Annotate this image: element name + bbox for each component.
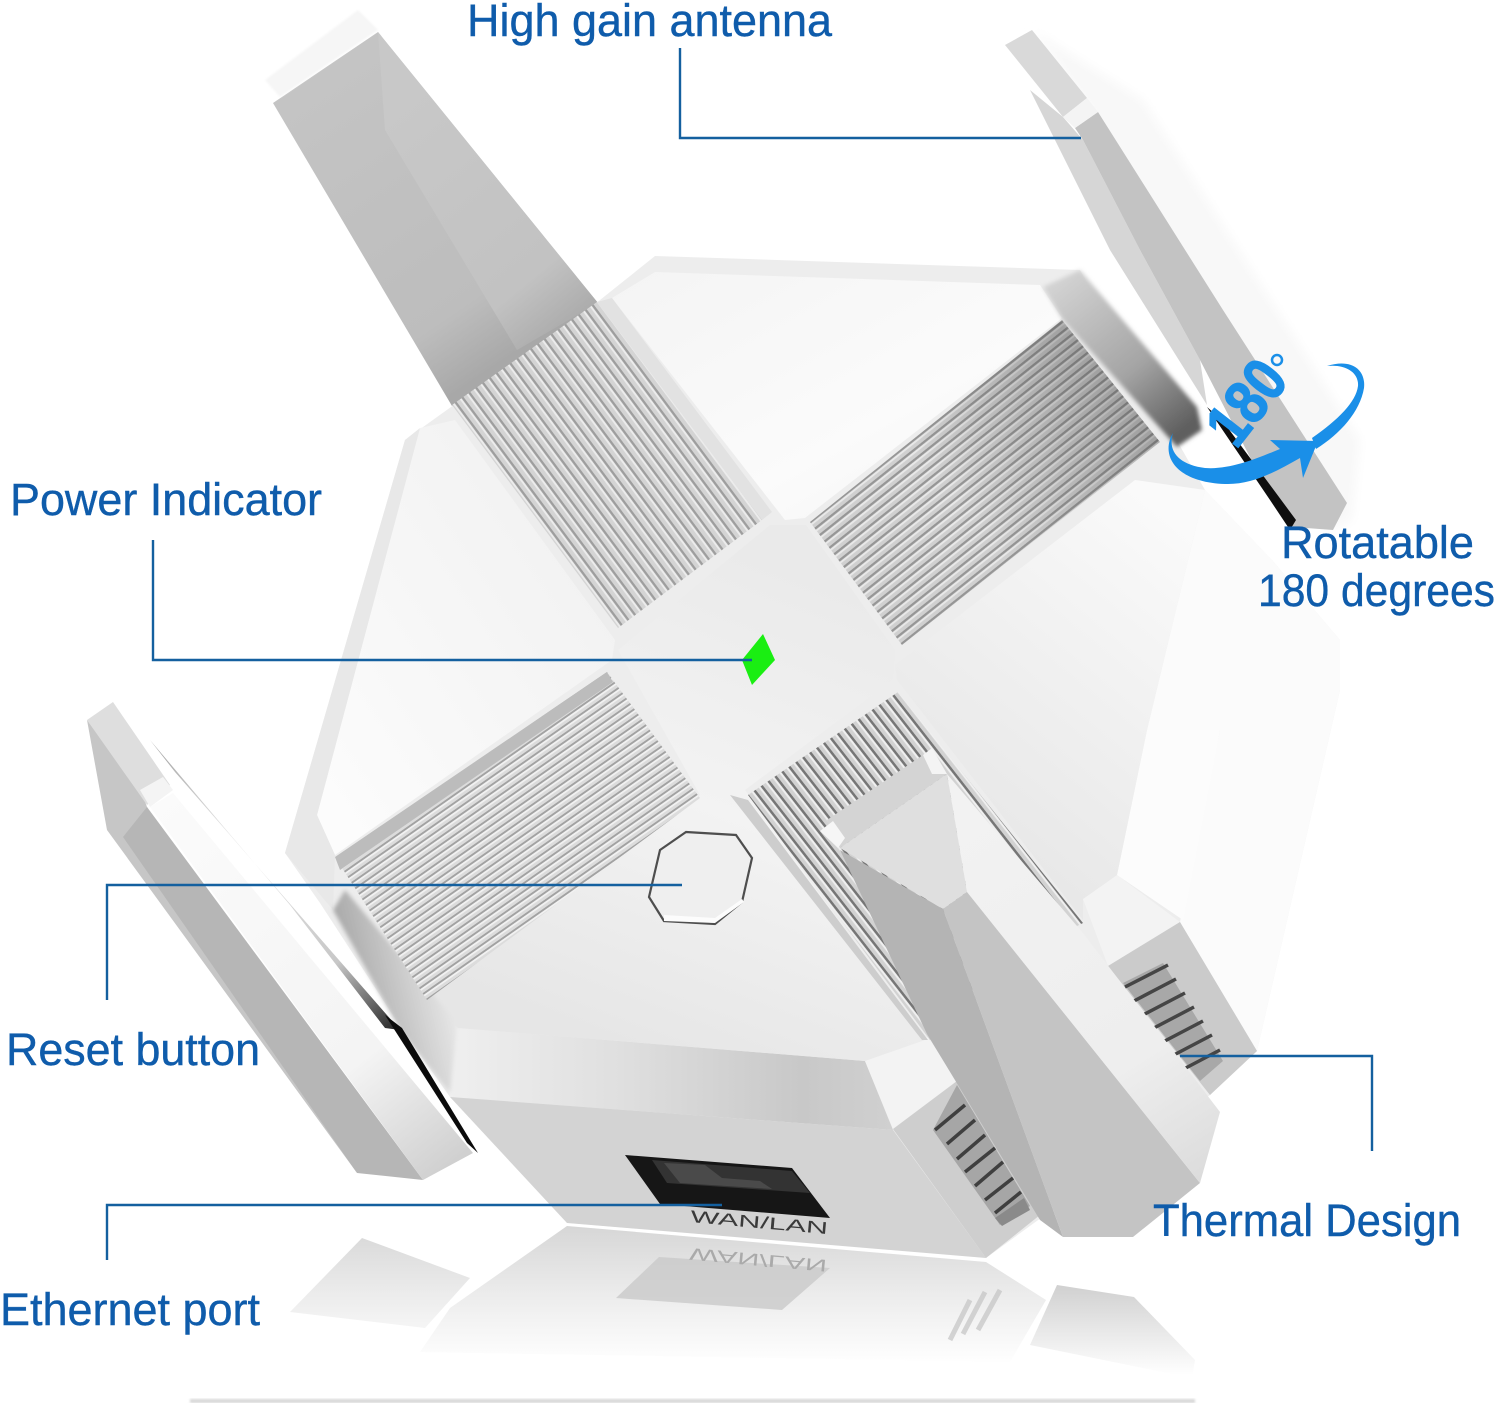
main grey strip [123, 807, 423, 1180]
right vents [1125, 965, 1220, 1071]
fin band edge: bottom left [335, 672, 613, 870]
cap end strip [140, 777, 173, 807]
cap end [820, 821, 845, 848]
label: rotatable 180 degrees [1258, 517, 1495, 616]
middle facet [943, 892, 1200, 1237]
cap [1005, 30, 1087, 117]
right panel [895, 480, 1205, 920]
leader: ethernet port [107, 1205, 722, 1260]
centre and bottom panel surface [427, 525, 925, 1061]
leader: reset button [107, 885, 682, 1000]
rib wedge by bottom right band [730, 795, 928, 1040]
ethernet port [625, 1155, 830, 1238]
cap strip [827, 755, 947, 848]
fin band: bottom right [748, 692, 1083, 1040]
right side face [1108, 922, 1257, 1095]
leader: power indicator [153, 540, 752, 660]
right facet [947, 774, 1220, 1183]
body outline [285, 256, 1340, 1258]
top right antenna glow [1033, 30, 1360, 530]
right lower bezel [1180, 490, 1340, 1051]
label: thermal design: Thermal Design [1153, 1195, 1461, 1246]
outer grey [87, 720, 357, 1173]
black gap [385, 1015, 478, 1153]
right vent recess [1123, 963, 1223, 1081]
router body [285, 256, 1340, 1258]
floor reflection of router: WAN/LAN [689, 1244, 828, 1275]
180 degree text: 180 [1193, 347, 1301, 459]
right vent corner [1083, 875, 1180, 966]
front vent recess [933, 1085, 1030, 1225]
degree sign [1272, 355, 1282, 365]
right bezel upper [1147, 490, 1272, 730]
ethernet port: WAN/LAN [690, 1207, 829, 1238]
floor reflection of router [190, 1226, 1195, 1403]
cap [87, 702, 170, 805]
fin band highlight: top left [597, 298, 772, 520]
front face [450, 1097, 986, 1258]
180 degree rotation arrow [1169, 347, 1364, 484]
left body shadow [333, 890, 457, 1093]
fin band: top right [810, 320, 1160, 645]
top left antenna [265, 10, 598, 406]
fin shade: top right [810, 320, 1160, 645]
main strip [1075, 112, 1347, 530]
cap top end [923, 748, 947, 774]
top panel [612, 272, 1062, 520]
reset button [649, 832, 752, 924]
white strip [150, 793, 473, 1180]
front top strip [440, 1028, 893, 1130]
left panel [317, 420, 615, 855]
leader: thermal design [1180, 1056, 1372, 1151]
leader: high gain antenna [680, 48, 1081, 138]
front corner [865, 1037, 957, 1129]
black gap [1207, 407, 1296, 530]
antenna shadow on body [1043, 270, 1202, 447]
front vents [935, 1105, 1021, 1213]
label: power indicator: Power Indicator [10, 474, 322, 525]
power indicator [742, 634, 775, 685]
inner strip [1030, 90, 1207, 405]
label: rotatable 180 degrees: Rotatable [1281, 517, 1474, 568]
top facet [840, 774, 967, 909]
left bezel [285, 428, 420, 910]
fin band: bottom left [335, 672, 700, 1000]
left facet [840, 850, 1063, 1237]
cap end strip [1063, 98, 1098, 128]
front side face [893, 1081, 1040, 1258]
bottom right antenna [820, 748, 1220, 1237]
right bezel strip [1117, 730, 1220, 920]
slit [150, 740, 400, 1030]
label: reset button: Reset button [6, 1024, 260, 1075]
label: ethernet port: Ethernet port [0, 1284, 260, 1335]
fin band: top left [452, 302, 762, 628]
top right antenna [1005, 30, 1347, 530]
bottom left antenna [87, 702, 478, 1180]
